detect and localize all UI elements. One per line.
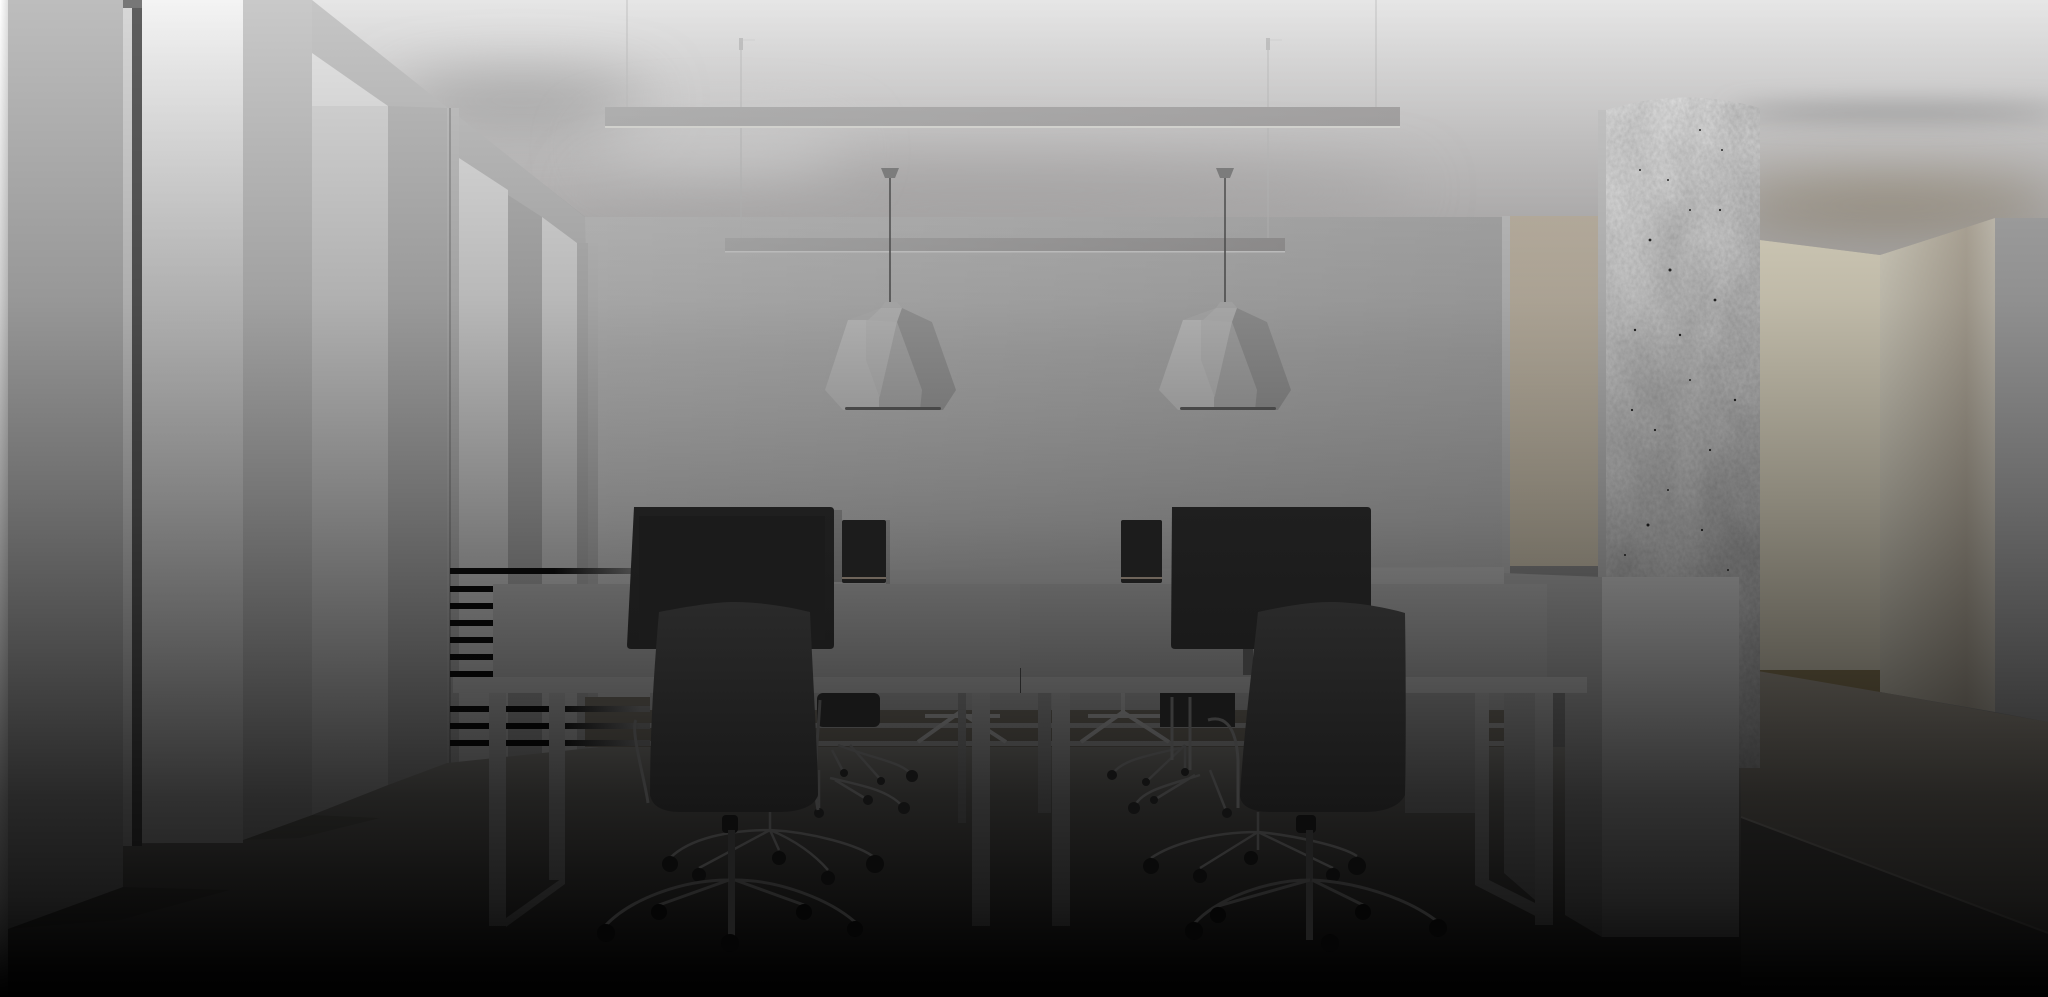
left pier 1 bbox=[8, 0, 123, 929]
carpet floor bbox=[0, 747, 1760, 997]
post bbox=[447, 108, 459, 788]
upper linear light bbox=[605, 107, 1400, 128]
pendant lamp right bbox=[1159, 302, 1291, 410]
left chair back bbox=[650, 602, 818, 812]
far left strip bbox=[0, 0, 8, 997]
window opening 4 bbox=[542, 217, 577, 780]
right chair back bbox=[1240, 602, 1406, 812]
lower linear light bbox=[725, 238, 1285, 252]
left pier 2 face bbox=[142, 0, 243, 843]
light block behind right desk bbox=[1405, 693, 1475, 813]
desktop bbox=[453, 668, 1587, 693]
light panel inside right desk leg bbox=[1504, 693, 1535, 900]
left chair front base bbox=[597, 815, 863, 952]
window slit bbox=[123, 0, 142, 846]
pendant lamp left bbox=[825, 302, 956, 410]
pendant ceiling cap left bbox=[881, 168, 899, 178]
suspension cables bbox=[627, 0, 1376, 238]
left chair base rear wheels bbox=[662, 812, 884, 885]
rear chair base left bbox=[814, 693, 918, 818]
pendant cord right bbox=[1224, 178, 1226, 303]
right monitor stand bbox=[1243, 649, 1253, 675]
floor edge highlight bbox=[1741, 817, 2048, 933]
window opening 3 bbox=[459, 158, 508, 780]
background desk rows seen under the desks bbox=[650, 693, 1510, 746]
blinds rails behind desk bbox=[450, 568, 650, 746]
ceiling bbox=[310, 0, 2048, 255]
right chair front base bbox=[1185, 815, 1447, 952]
right block bbox=[1880, 218, 2048, 722]
right chair rear base bbox=[1143, 812, 1366, 883]
pendant ceiling cap right bbox=[1216, 168, 1234, 178]
desk dividers bbox=[493, 584, 1547, 677]
window opening 2 bbox=[312, 53, 388, 830]
upper rear divider bbox=[890, 567, 1504, 585]
right concrete floor bbox=[1740, 668, 2048, 933]
desk legs bbox=[489, 693, 1553, 927]
warm corridor bbox=[1502, 110, 1880, 695]
small monitor left bbox=[842, 520, 886, 583]
pier 4 bbox=[508, 195, 542, 780]
right monitor bbox=[1171, 507, 1371, 649]
monitor back panel edges bbox=[834, 510, 890, 585]
back wall bbox=[585, 217, 1505, 697]
small monitor right bbox=[1121, 520, 1162, 583]
rear chair base right bbox=[1107, 693, 1238, 818]
pendant cord left bbox=[889, 178, 891, 303]
left wall with windows bbox=[243, 0, 600, 850]
left monitor bbox=[627, 507, 834, 649]
pier 3 bbox=[388, 106, 447, 800]
floor band behind desks bbox=[585, 697, 1505, 747]
left chair armrests bbox=[635, 700, 820, 810]
concrete column bbox=[1606, 86, 1760, 768]
storage cabinet bbox=[1504, 573, 1739, 937]
left pier 2 side bbox=[243, 0, 312, 840]
soft floor shadows bbox=[243, 815, 380, 840]
